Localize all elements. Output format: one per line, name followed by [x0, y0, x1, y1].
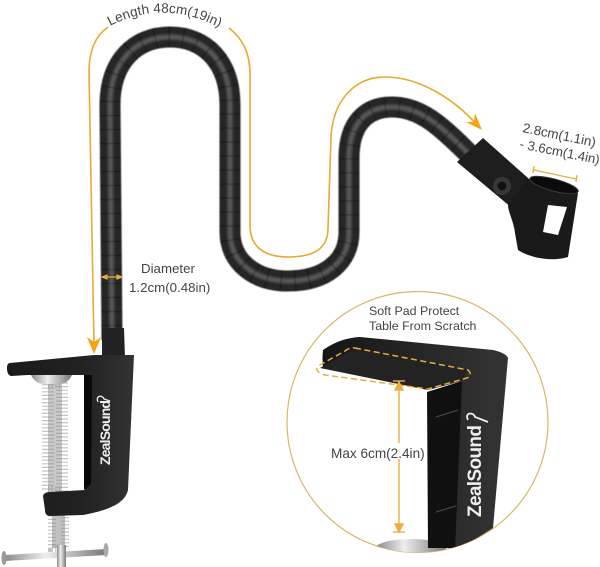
clamp inner face — [84, 375, 92, 490]
height arrow — [393, 381, 405, 532]
clamp screw — [31, 375, 72, 548]
height label: Max 6cm(2.4in) — [331, 446, 425, 461]
soft pad label — [369, 304, 477, 333]
pad dashed outline — [317, 348, 470, 389]
clamp logo note icon — [97, 396, 110, 402]
inset screw plate — [377, 539, 446, 552]
clip width marker — [533, 166, 577, 182]
inset clamp back — [427, 381, 462, 548]
soft pad label: Soft Pad Protect — [369, 304, 460, 318]
cup rim — [528, 173, 580, 197]
clamp body — [7, 355, 134, 516]
diameter label — [129, 261, 210, 295]
diameter marker — [102, 275, 122, 279]
clip width label: - 3.6cm(1.4in) — [518, 136, 600, 167]
diameter label: Diameter — [141, 261, 196, 276]
inset clamp pins — [436, 410, 458, 512]
soft pad label: Table From Scratch — [369, 319, 477, 333]
clip width label: 2.8cm(1.1in) — [521, 120, 597, 150]
inset pad — [320, 348, 468, 390]
circle outline — [287, 292, 548, 552]
inset clamp body — [322, 337, 508, 552]
clamp T-handle — [2, 543, 108, 567]
detail circle — [287, 292, 548, 557]
clip width label — [518, 120, 600, 167]
inset note icon — [467, 414, 488, 422]
inset logo: ZealSound — [465, 425, 486, 517]
cup window — [543, 205, 567, 235]
collar — [457, 138, 530, 208]
diameter label: 1.2cm(0.48in) — [129, 280, 210, 295]
clamp logo: ZealSound — [97, 400, 113, 465]
cup body — [508, 178, 578, 259]
microphone clip head — [457, 138, 580, 259]
orange length arrow: right of arch and S-curve — [229, 28, 482, 257]
pivot bolt — [493, 177, 511, 195]
tube socket — [102, 328, 125, 358]
orange length arrow: left of arch — [87, 27, 108, 354]
desk clamp — [2, 328, 134, 567]
length label: Length 48cm(19in) — [107, 3, 222, 28]
gooseneck tube — [110, 37, 470, 340]
